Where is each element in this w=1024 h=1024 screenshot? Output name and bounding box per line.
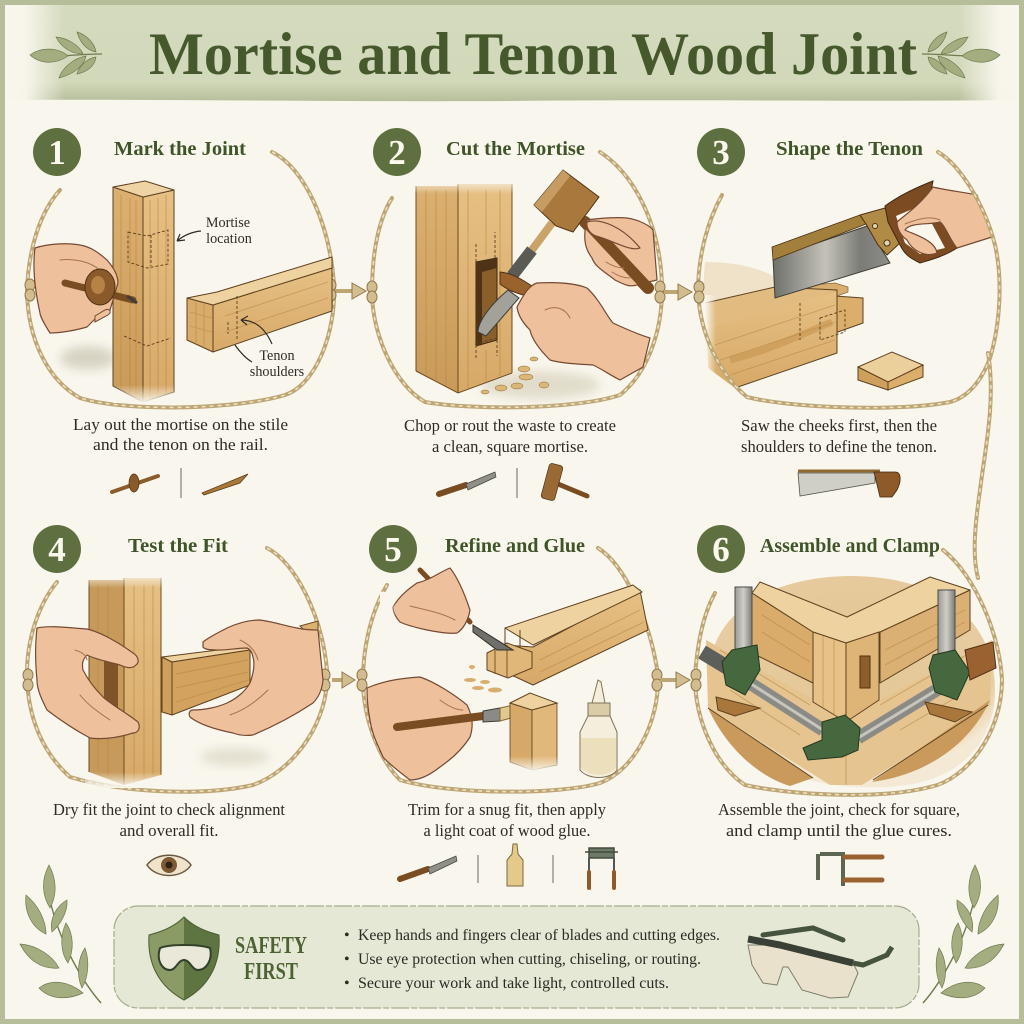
safety bullet list: Secure your work and take light, controlled cuts. <box>358 975 669 992</box>
caption: Lay out the mortise on the stile <box>73 415 288 434</box>
decoration: left corner laurel <box>20 865 101 1003</box>
step number 5 <box>369 525 417 573</box>
mallet <box>532 170 648 288</box>
heading: assemble and clamp: Assemble and Clamp <box>760 535 940 557</box>
callout: mortise location <box>177 215 252 247</box>
rope linking step 3 to step 6 <box>975 353 991 578</box>
icon: clamp small <box>585 848 618 888</box>
step number 1 <box>33 128 81 176</box>
panel: safety first <box>114 906 919 1008</box>
safety bullet list: • <box>344 975 350 992</box>
caption <box>741 416 937 456</box>
safety bullet list <box>344 927 720 992</box>
caption <box>408 800 607 840</box>
callout: mortise location: Mortise <box>206 215 250 231</box>
arrow: step 4 to 5 <box>332 672 355 688</box>
icon: safety glasses <box>748 928 892 998</box>
panel: step 5 refine and glue <box>357 525 662 888</box>
tenon rail <box>487 585 648 685</box>
icon: left title laurel <box>30 32 102 78</box>
heading: test the fit: Test the Fit <box>128 535 228 557</box>
table wash <box>702 262 785 305</box>
caption: Dry fit the joint to check alignment <box>53 800 285 819</box>
heading: cut the mortise: Cut the Mortise <box>446 138 585 160</box>
panel: step 2 cut the mortise <box>367 128 665 501</box>
step number 3 <box>697 128 745 176</box>
wood workpiece <box>700 283 863 390</box>
rope frame <box>691 550 1002 795</box>
rope frame <box>367 152 665 407</box>
right hand <box>189 620 323 735</box>
off-cut block <box>858 352 923 390</box>
chisel <box>478 250 545 336</box>
shavings <box>464 665 502 692</box>
caption: Assemble the joint, check for square, <box>718 800 960 819</box>
rail with tenon lines <box>187 257 332 352</box>
rope frame <box>357 548 662 792</box>
wood background vignette <box>708 576 995 787</box>
lower hand <box>517 283 650 380</box>
safety bullet list: Keep hands and fingers clear of blades and cutting edges. <box>358 927 720 944</box>
heading: mark the joint: Mark the Joint <box>114 138 246 160</box>
panel: step 1 mark the joint <box>25 128 336 498</box>
safety bullet list: Use eye protection when cutting, chiseling, or routing. <box>358 951 701 968</box>
safety first label <box>235 933 307 985</box>
panel: step 6 assemble and clamp <box>691 525 1002 886</box>
panel: step 3 shape the tenon <box>694 128 1000 497</box>
glue bottle <box>580 680 617 778</box>
top hand with chisel <box>380 568 513 650</box>
heading: shape the tenon: Shape the Tenon <box>776 138 924 160</box>
table shadow <box>200 748 270 766</box>
rope frame <box>23 548 330 792</box>
caption: shoulders to define the tenon. <box>741 437 937 456</box>
callout: tenon shoulders <box>235 316 305 380</box>
bottom hand with brush <box>367 677 522 780</box>
step number 5: 5 <box>384 530 402 569</box>
workbench <box>706 640 992 786</box>
arrow: step 2 to 3 <box>664 284 692 300</box>
icon: right title laurel <box>922 32 1000 78</box>
far end of rail <box>300 621 318 632</box>
hand with marking gauge <box>34 244 137 333</box>
arrow: step 5 to 6 <box>660 672 690 688</box>
arrow: step 1 to 2 <box>336 283 366 299</box>
wood corner joint <box>752 577 970 722</box>
callout: mortise location: location <box>206 231 252 247</box>
step number 4: 4 <box>48 530 66 569</box>
caption <box>718 800 960 840</box>
left hand <box>36 627 139 739</box>
step number 3: 3 <box>712 133 730 172</box>
step number 4 <box>33 525 81 573</box>
rail <box>162 646 250 715</box>
caption <box>404 416 616 456</box>
step number 6 <box>697 525 745 573</box>
icon: bar clamp small <box>818 854 882 886</box>
safety bullet list: • <box>344 927 350 944</box>
rope frame <box>25 152 336 407</box>
caption: and clamp until the glue cures. <box>726 821 952 840</box>
panel: step 4 test the fit <box>23 525 330 876</box>
wood post <box>85 572 165 788</box>
caption: Saw the cheeks first, then the <box>741 416 937 435</box>
saw <box>772 181 957 298</box>
step number 6: 6 <box>712 530 730 569</box>
icon: eye <box>147 855 191 876</box>
cast shadow <box>60 346 116 370</box>
caption: a light coat of wood glue. <box>424 821 590 840</box>
caption: Trim for a snug fit, then apply <box>408 800 607 819</box>
caption <box>53 800 285 840</box>
icon: chisel <box>439 472 496 494</box>
bench shadow <box>480 371 600 399</box>
step number 2 <box>373 128 421 176</box>
glued block <box>507 693 561 772</box>
caption: a clean, square mortise. <box>432 437 588 456</box>
icon: marking gauge <box>112 474 158 492</box>
safety first label: FIRST <box>244 959 298 985</box>
rope frame step 3 <box>694 152 1000 408</box>
icon: mallet <box>541 463 587 501</box>
heading: refine and glue: Refine and Glue <box>445 535 585 557</box>
wood post with mortise <box>412 178 516 393</box>
safety first label: SAFETY <box>235 933 307 959</box>
caption: Chop or rout the waste to create <box>404 416 616 435</box>
clamp bars and jaws <box>702 587 996 760</box>
step number 2: 2 <box>388 133 406 172</box>
hand on saw <box>897 187 992 255</box>
icon: glue bottle small <box>507 844 523 886</box>
wood chips <box>481 357 549 394</box>
caption <box>73 415 288 454</box>
step number 1: 1 <box>48 133 66 172</box>
wood post <box>113 181 174 403</box>
callout: tenon shoulders: Tenon <box>259 348 295 364</box>
caption: and overall fit. <box>120 821 218 840</box>
decoration: right corner laurel <box>923 865 1004 1003</box>
safety bullet list: • <box>344 951 350 968</box>
caption: and the tenon on the rail. <box>93 435 268 454</box>
icon: chisel small <box>400 856 457 879</box>
icon: shield with goggles <box>149 917 219 1000</box>
title: Mortise and Tenon Wood Joint <box>149 21 917 87</box>
callout: tenon shoulders: shoulders <box>250 364 305 380</box>
title banner <box>5 5 1019 103</box>
icon: pencil <box>202 474 248 495</box>
icon: saw <box>798 471 900 497</box>
upper hand <box>585 218 657 288</box>
